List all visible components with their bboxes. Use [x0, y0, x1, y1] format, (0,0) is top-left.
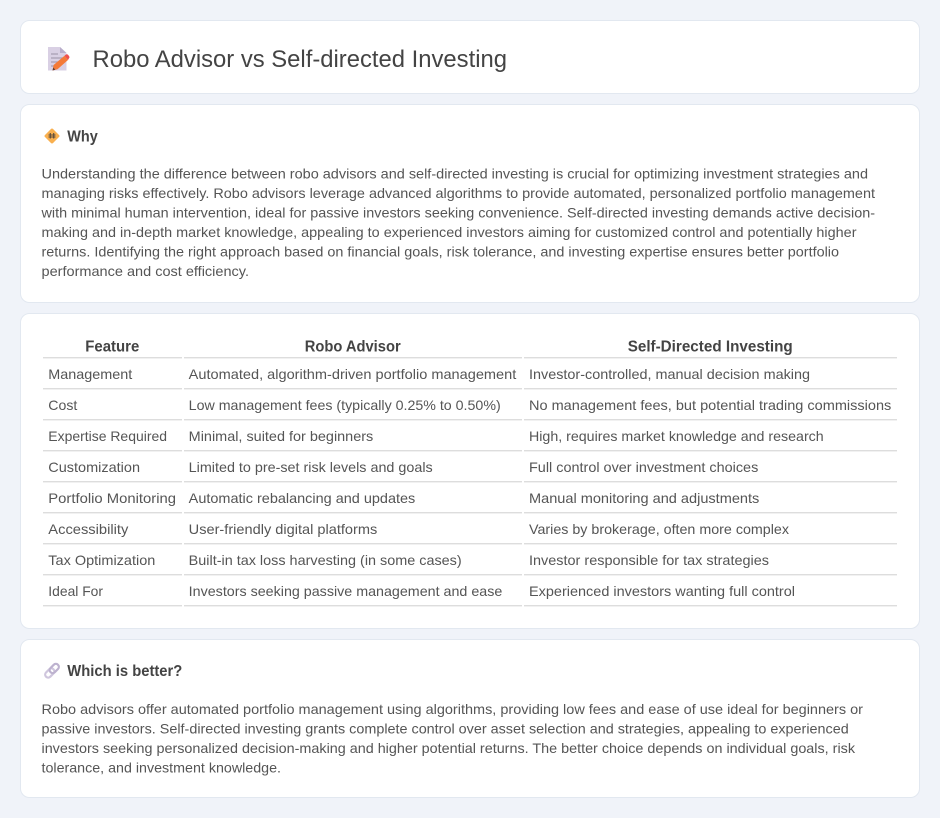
text block: why explanation: with minimal human intervention, ideal for passive investors seeking convenience. Self-directed investing demands active decision- [40, 204, 875, 220]
table row: ideal for: Ideal For [48, 583, 103, 599]
table row: customization [43, 459, 897, 482]
table row: portfolio monitoring [43, 490, 897, 513]
table header row: Feature [85, 338, 139, 356]
icon: orange diamond sign [44, 128, 60, 144]
text block: why explanation: Understanding the difference between robo advisors and self-directed investing is crucial for optimizing investment strategies and [42, 166, 868, 182]
panel: why [20, 104, 920, 302]
table row: management: Management [48, 366, 132, 382]
table row: portfolio monitoring: Manual monitoring and adjustments [529, 490, 759, 506]
table header row: Robo Advisor [305, 338, 401, 356]
table row: ideal for [43, 583, 897, 606]
table row: expertise required: High, requires market knowledge and research [529, 428, 824, 444]
table row: cost: Low management fees (typically 0.25% to 0.50%) [189, 397, 501, 413]
table row: management: Investor-controlled, manual decision making [529, 366, 810, 382]
icon: chain link [44, 663, 60, 679]
table row: ideal for: Experienced investors wanting full control [529, 583, 795, 599]
table row: customization: Limited to pre-set risk levels and goals [189, 459, 433, 475]
table row: cost: Cost [48, 397, 77, 413]
text block: verdict: Robo advisors offer automated portfolio management using algorithms, providing low fees and ease of use ideal for beginners or [42, 701, 863, 717]
table row: management: Automated, algorithm-driven portfolio management [189, 366, 516, 382]
table row: tax optimization: Investor responsible for tax strategies [529, 552, 769, 568]
table row: customization: Customization [48, 459, 140, 475]
text block: verdict: passive investors. Self-directed investing grants complete control over asset selection and strategies, appealing to experienced [42, 720, 849, 736]
heading: which is better: Which is better? [67, 663, 182, 680]
text block: verdict: investors seeking personalized decision-making and higher potential returns. The better choice depends on individual goals, risk [42, 740, 856, 756]
table header row: Self-Directed Investing [628, 338, 793, 356]
text block: why explanation: returns. Identifying the right approach based on financial goals, risk tolerance, and investing expertise ensures better portfolio [42, 244, 839, 260]
table row: accessibility: Varies by brokerage, often more complex [529, 521, 789, 537]
table row: management [43, 366, 897, 389]
panel: which is better [20, 640, 920, 798]
text block: why explanation: making and in-depth market knowledge, appealing to experienced investors aiming for customized control and potentially higher [42, 224, 857, 240]
panel: comparison table [20, 314, 920, 628]
table row: tax optimization [43, 552, 897, 575]
table row: expertise required: Expertise Required [48, 428, 167, 444]
table header row [43, 338, 897, 358]
title: Robo Advisor vs Self-directed Investing [92, 46, 507, 73]
table row: customization: Full control over investment choices [529, 459, 758, 475]
table row: expertise required: Minimal, suited for beginners [189, 428, 373, 444]
table row: cost: No management fees, but potential trading commissions [529, 397, 891, 413]
table row: accessibility: User-friendly digital platforms [189, 521, 377, 537]
table row: tax optimization: Tax Optimization [48, 552, 155, 568]
table row: cost [43, 397, 897, 420]
text block: why explanation: performance and cost efficiency. [42, 263, 249, 279]
table row: tax optimization: Built-in tax loss harvesting (in some cases) [189, 552, 462, 568]
text block: why explanation [40, 166, 875, 279]
panel: title header [20, 20, 920, 94]
text block: verdict [42, 701, 863, 776]
icon: note with pencil [48, 47, 69, 70]
table row: portfolio monitoring: Portfolio Monitoring [48, 490, 176, 506]
table row: accessibility: Accessibility [48, 521, 128, 537]
text block: why explanation: managing risks effectively. Robo advisors leverage advanced algorithms to provide automated, personalized portfolio management [42, 185, 875, 201]
table row: portfolio monitoring: Automatic rebalancing and updates [189, 490, 415, 506]
table row: expertise required [43, 428, 897, 451]
table row: accessibility [43, 521, 897, 544]
heading: why: Why [67, 128, 98, 146]
table row: ideal for: Investors seeking passive management and ease [189, 583, 503, 599]
text block: verdict: tolerance, and investment knowledge. [42, 760, 281, 776]
